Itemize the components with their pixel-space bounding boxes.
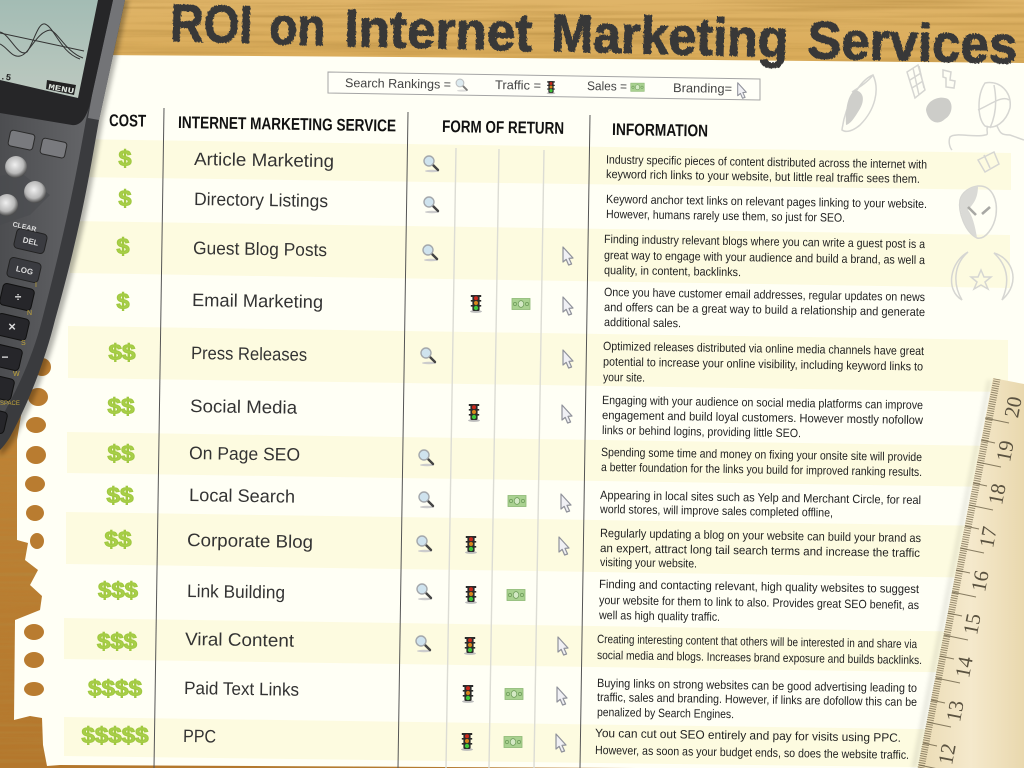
row: Paid Text Links: $$$$	[88, 676, 142, 701]
wooden ruler: 15	[958, 611, 986, 637]
row: Corporate Blog: an expert, attract long tail search terms and increase the traffic	[600, 541, 920, 560]
row: PPC: $$$$$	[82, 723, 148, 748]
title	[170, 0, 1018, 75]
wooden ruler: 14	[950, 654, 978, 680]
row: Local Search: $$	[106, 483, 134, 508]
row: Corporate Blog: visiting your website.	[600, 555, 697, 571]
column headers	[109, 111, 708, 141]
title: Marketing	[551, 4, 789, 69]
row: Social Media: Engaging with your audience on social media platforms can improve	[602, 393, 923, 412]
row: Local Search: Local Search	[189, 485, 295, 507]
row: On Page SEO: Spending some time and money on fixing your onsite site will provide	[601, 445, 922, 464]
row: Corporate Blog: $$	[104, 527, 132, 552]
row: Article Marketing: keyword rich links to your website, but little real traffic sees them.	[606, 167, 920, 186]
row: Local Search	[106, 483, 921, 520]
row: Link Building: well as high quality traffic.	[598, 608, 720, 624]
row: Directory Listings	[118, 186, 927, 225]
calculator keys: LOG	[15, 264, 34, 277]
row: PPC: PPC	[183, 726, 216, 747]
row: Paid Text Links	[88, 676, 917, 721]
calculator keys: W	[13, 371, 20, 378]
row: Guest Blog Posts	[116, 232, 925, 279]
row: Social Media: Social Media	[190, 396, 298, 418]
row: Email Marketing: $	[116, 289, 130, 314]
table grid lines	[154, 108, 590, 768]
wooden ruler: 19	[991, 438, 1019, 464]
calculator screen: MENU	[47, 83, 75, 97]
row: Email Marketing: and offers can be a great way to build a relationship and generate	[604, 300, 925, 319]
row: On Page SEO: On Page SEO	[189, 443, 300, 465]
row: Paid Text Links: Paid Text Links	[184, 678, 299, 700]
row: Article Marketing: Industry specific pieces of content distributed across the internet with	[606, 153, 927, 172]
wooden ruler: 18	[983, 481, 1011, 507]
row: Directory Listings: Directory Listings	[194, 189, 328, 211]
legend: Search Rankings =	[345, 76, 451, 92]
row: Press Releases	[108, 339, 925, 385]
row: Corporate Blog: Corporate Blog	[187, 530, 313, 552]
row: Email Marketing: additional sales.	[604, 315, 681, 330]
row: Local Search: Appearing in local sites such as Yelp and Merchant Circle, for real	[600, 488, 921, 507]
row: On Page SEO	[108, 441, 922, 479]
row: Viral Content	[97, 629, 922, 667]
row: PPC: You can cut out SEO entirely and pay for visits using PPC.	[595, 726, 901, 745]
calculator keys: S	[21, 340, 26, 347]
column headers: INFORMATION	[612, 120, 708, 141]
row: PPC: However, as soon as your budget ends, so does the website traffic.	[595, 743, 909, 762]
legend	[328, 72, 760, 100]
row: Guest Blog Posts: great way to engage with your audience and build a brand, as well a	[604, 248, 925, 267]
calculator keys: DEL	[22, 235, 39, 248]
row: Press Releases: $$	[108, 340, 136, 365]
row: PPC	[82, 723, 909, 762]
title: Services	[807, 11, 1018, 75]
row: Corporate Blog: Regularly updating a blog on your website can build your brand as	[600, 526, 921, 545]
row: Guest Blog Posts: Guest Blog Posts	[193, 238, 327, 260]
row: Corporate Blog	[104, 526, 921, 571]
wooden ruler	[912, 378, 1024, 768]
calculator keys: −	[1, 350, 9, 364]
legend: Sales =	[587, 79, 627, 94]
row: Link Building: Link Building	[187, 581, 285, 603]
row: Viral Content: $$$	[97, 629, 137, 654]
row: Press Releases: potential to increase your online visibility, including keyword links to	[603, 355, 923, 374]
column headers: FORM OF RETURN	[442, 117, 564, 138]
row: Article Marketing: $	[118, 146, 132, 171]
row: Press Releases: Press Releases	[191, 343, 307, 365]
row: Social Media: $$	[108, 394, 134, 419]
calculator keys	[0, 130, 67, 434]
row: Social Media: links or behind logins, providing little SEO.	[602, 423, 801, 440]
wooden ruler: 17	[974, 524, 1002, 550]
row: Link Building: Finding and contacting relevant, high quality websites to suggest	[599, 577, 920, 596]
wooden ruler: 12	[933, 741, 961, 767]
row: Viral Content: Viral Content	[185, 629, 294, 651]
row: Link Building	[98, 577, 920, 624]
calculator keys: ÷	[15, 290, 22, 304]
yellow row stripes	[64, 139, 1011, 768]
sketch doodles	[842, 65, 1024, 300]
row: Viral Content: social media and blogs. Increases brand exposure and builds backlinks.	[597, 648, 922, 667]
row: Email Marketing: Email Marketing	[192, 290, 323, 312]
row: Social Media: engagement and build loyal customers. However mostly nofollow	[602, 408, 923, 427]
row: Local Search: world stores, will improve sales completed offline,	[599, 502, 833, 520]
calculator screen	[0, 0, 98, 98]
row: Paid Text Links: Buying links on strong websites can be good advertising leading to	[597, 676, 917, 695]
row: Press Releases: Optimized releases distributed via online media channels have great	[603, 339, 925, 358]
column headers: COST	[109, 111, 147, 131]
graphing calculator	[0, 0, 129, 456]
wooden ruler: 16	[966, 568, 994, 594]
title: Internet	[344, 0, 533, 63]
row: Directory Listings: However, humans rarely use them, so just for SEO.	[606, 207, 845, 225]
calculator keys: SPACE	[0, 401, 20, 407]
calculator keys: ×	[8, 319, 16, 334]
row: On Page SEO: a better foundation for the links you build for improved ranking results.	[601, 460, 922, 479]
row: On Page SEO: $$	[108, 441, 134, 466]
legend: Traffic =	[495, 78, 541, 93]
calculator keys: CLEAR	[12, 221, 37, 234]
legend: Branding=	[673, 81, 732, 96]
row: Email Marketing	[116, 285, 925, 330]
column headers: INTERNET MARKETING SERVICE	[178, 113, 396, 135]
row: Guest Blog Posts: quality, in content, backlinks.	[604, 263, 741, 279]
row: Guest Blog Posts: $	[116, 234, 130, 259]
row: Link Building: your website for them to link to also. Provides great SEO benefit, as	[599, 593, 919, 612]
row: Directory Listings: Keyword anchor text links on relevant pages linking to your website.	[606, 192, 927, 211]
row: Paid Text Links: traffic, sales and branding. However, if links are dofollow this can be	[597, 690, 917, 709]
calculator keys: I	[35, 282, 37, 289]
row: Paid Text Links: penalized by Search Engines.	[597, 705, 734, 721]
row: Article Marketing	[118, 146, 927, 186]
row: Social Media	[108, 393, 923, 440]
row: Directory Listings: $	[118, 186, 132, 211]
row: Link Building: $$$	[98, 578, 138, 603]
row: Article Marketing: Article Marketing	[194, 149, 334, 171]
row: Guest Blog Posts: Finding industry relevant blogs where you can write a guest post is a	[604, 232, 925, 251]
row: Email Marketing: Once you have customer email addresses, regular updates on news	[604, 285, 925, 304]
row: Viral Content: Creating interesting content that others will be interested in and share via	[597, 632, 917, 651]
calculator keys: N	[27, 310, 32, 317]
wooden ruler: 13	[941, 698, 969, 724]
row: Press Releases: your site.	[603, 370, 645, 385]
